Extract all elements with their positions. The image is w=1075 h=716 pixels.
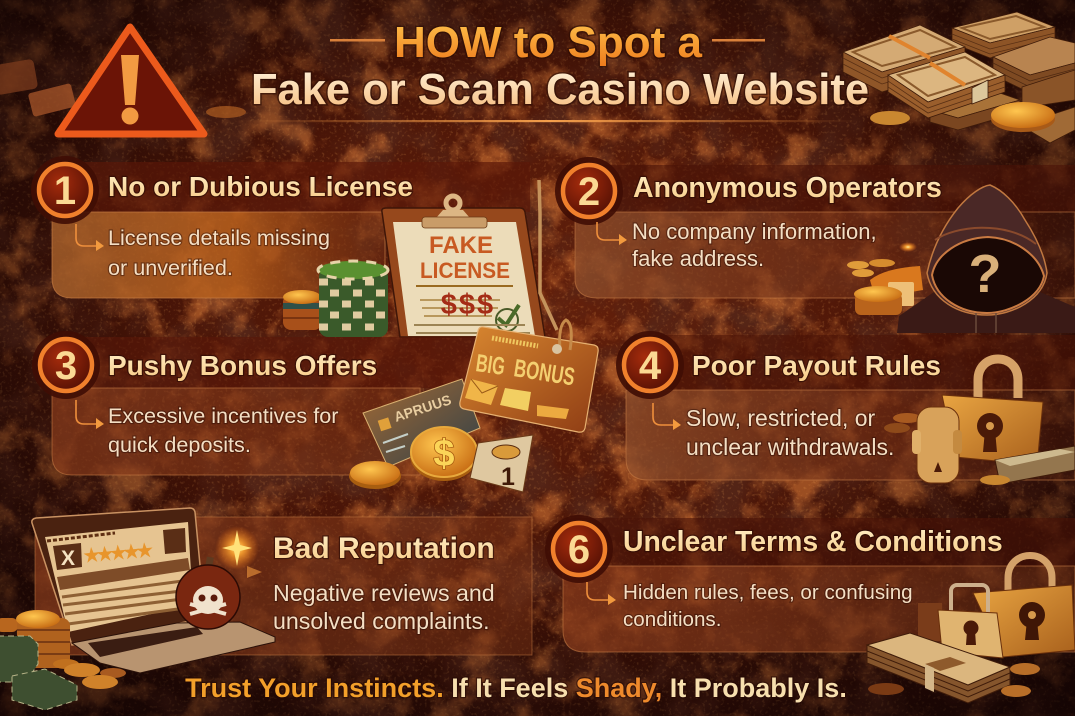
stack: left xyxy=(843,25,965,92)
stack: back right xyxy=(952,12,1055,58)
badge 2 xyxy=(555,157,623,225)
stack: right low xyxy=(1022,70,1075,108)
panel 2: anonymous operators xyxy=(555,157,1075,298)
panel 4: poor payout rules xyxy=(616,331,1075,480)
icon: fake license clipboard xyxy=(382,180,557,337)
badge 6 xyxy=(545,515,613,583)
arrow 3 xyxy=(76,400,104,429)
badge 2: 2 xyxy=(578,170,600,214)
icon: fake license clipboard: LICENSE xyxy=(420,258,510,283)
coin: large xyxy=(991,102,1055,132)
icon: padlocks and cash xyxy=(884,359,1075,485)
panel 3 body xyxy=(52,388,420,475)
badge 6: 6 xyxy=(568,528,590,572)
small lock xyxy=(918,585,1003,658)
icon: warning triangle xyxy=(58,27,204,134)
spark xyxy=(215,526,259,570)
large padlock xyxy=(942,359,1043,465)
decoration: left cards xyxy=(0,59,246,118)
text 1: License details missing xyxy=(108,225,330,250)
title: HOW to Spot a xyxy=(394,18,703,67)
text 2: No company information, xyxy=(632,219,877,244)
text 2: fake address. xyxy=(632,246,764,271)
cash bundle xyxy=(867,633,1010,703)
stack: far right xyxy=(993,37,1075,93)
panel 3: pushy bonus offers xyxy=(32,331,490,475)
arrow 4 xyxy=(653,403,681,430)
text 6: Hidden rules, fees, or confusing xyxy=(623,581,913,604)
heading 4: Poor Payout Rules xyxy=(692,350,941,381)
text 5: Negative reviews and xyxy=(273,580,495,606)
icon: fake license clipboard: $$$ xyxy=(441,289,495,321)
panel 6 body xyxy=(563,566,1075,652)
icon: poker chips xyxy=(283,261,388,337)
text 3: Excessive incentives for xyxy=(108,403,338,428)
small chip stack xyxy=(283,290,322,330)
icon: locks and cash bottom right xyxy=(867,556,1075,703)
card: number one: 1 xyxy=(501,463,515,491)
card: APRUUS xyxy=(392,391,453,425)
title xyxy=(240,18,869,122)
panel 1: no or dubious license xyxy=(31,156,530,298)
large chip stack xyxy=(318,261,388,337)
arrow 1 xyxy=(76,224,104,251)
heading 2: Anonymous Operators xyxy=(633,172,942,204)
footer tagline: Trust Your Instincts. If It Feels Shady, It Probably Is. xyxy=(185,673,847,703)
icon: laptop with reviews and bomb xyxy=(0,508,275,710)
large lock xyxy=(973,556,1075,657)
icon: fake license clipboard: FAKE xyxy=(429,232,493,259)
bomb xyxy=(176,557,240,629)
badge 1: 1 xyxy=(54,169,76,213)
panel 5: bad reputation xyxy=(35,517,532,655)
icon: hooded figure xyxy=(847,185,1075,333)
cash xyxy=(980,446,1075,485)
text 3: quick deposits. xyxy=(108,432,251,457)
icon: hooded figure: ? xyxy=(968,244,1002,304)
coins xyxy=(868,663,1040,697)
coin: small xyxy=(349,461,401,489)
coin: dollar xyxy=(410,427,478,481)
title: Fake or Scam Casino Website xyxy=(251,66,869,114)
laptop screen: ★★★★★ xyxy=(81,539,155,568)
text 4: unclear withdrawals. xyxy=(686,434,894,460)
laptop base xyxy=(72,622,275,673)
panel 1 body xyxy=(52,212,385,298)
badge 3 xyxy=(32,331,100,399)
badge 4: 4 xyxy=(639,344,662,388)
stack: lower right xyxy=(1020,107,1075,143)
card: number one xyxy=(470,435,533,492)
arrow 2 xyxy=(597,222,627,245)
stack: front xyxy=(888,52,1005,118)
heading 3: Pushy Bonus Offers xyxy=(108,350,377,381)
heading 5: Bad Reputation xyxy=(273,532,495,565)
coin: dollar: $ xyxy=(433,433,455,475)
heading 6: Unclear Terms & Conditions xyxy=(623,526,1003,558)
chips and coins xyxy=(0,610,126,710)
panel 2 body xyxy=(575,212,1075,298)
text 1: or unverified. xyxy=(108,255,233,280)
badge 4 xyxy=(616,331,684,399)
panel 6: unclear terms and conditions xyxy=(545,515,1075,652)
badge 1 xyxy=(31,156,99,224)
arrow 6 xyxy=(587,582,616,605)
gold stacks xyxy=(847,242,923,315)
bonus tag: BONUS xyxy=(512,354,577,391)
pen hook xyxy=(539,180,557,330)
bonus tag: BIG xyxy=(474,349,507,381)
bonus tag xyxy=(460,320,598,432)
panel 4 body xyxy=(626,390,1075,480)
laptop screen: X xyxy=(61,547,75,570)
card xyxy=(363,379,480,467)
coin: small xyxy=(870,111,910,125)
coins behind xyxy=(884,413,921,433)
text 6: conditions. xyxy=(623,608,721,631)
small padlock xyxy=(912,407,962,483)
stack: lower middle xyxy=(930,93,1020,130)
text 4: Slow, restricted, or xyxy=(686,405,875,431)
heading 1: No or Dubious License xyxy=(108,171,413,202)
text 5: unsolved complaints. xyxy=(273,608,490,634)
icon: big bonus tag and coins xyxy=(349,320,598,492)
icon: money stacks top right xyxy=(843,12,1075,143)
arrow 5 xyxy=(247,566,262,578)
laptop screen xyxy=(32,508,205,645)
badge 3: 3 xyxy=(55,344,77,388)
